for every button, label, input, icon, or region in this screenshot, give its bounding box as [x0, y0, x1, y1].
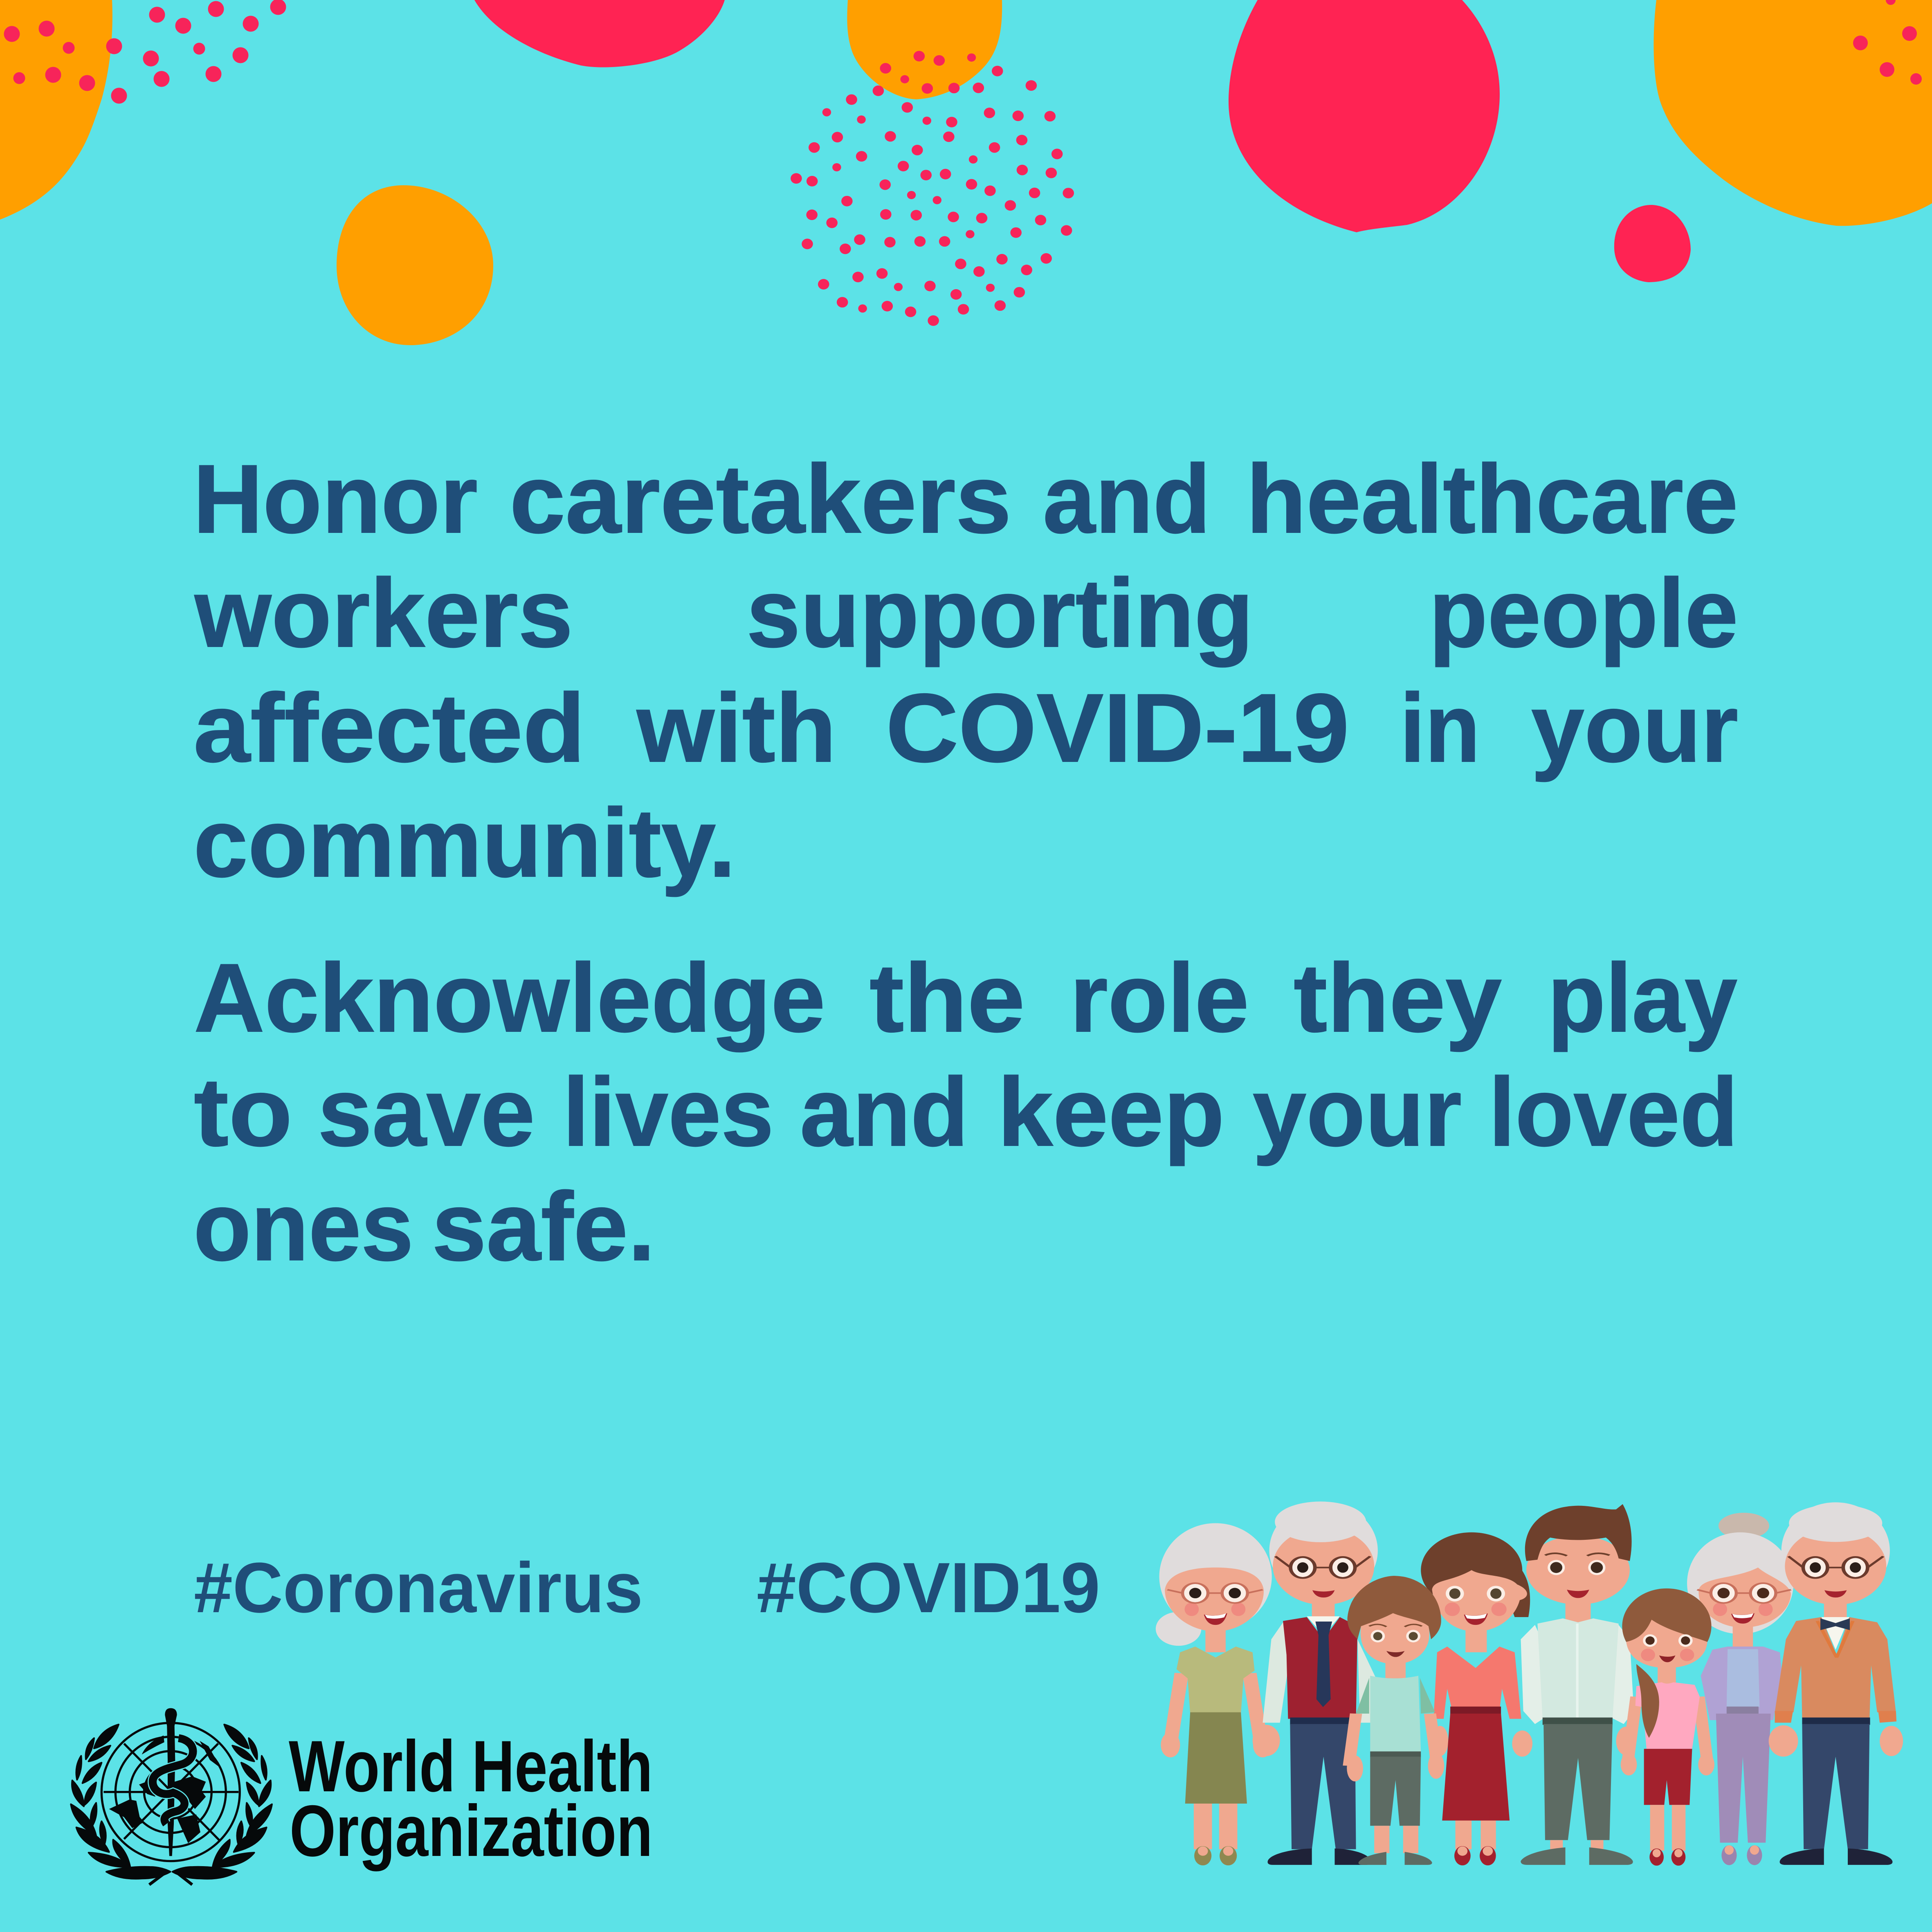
wreath left: [71, 1725, 171, 1879]
person: grandmother in purple: [1687, 1513, 1793, 1865]
text block: honor caretakers: Honor: [193, 445, 478, 553]
blob: small red: [1614, 205, 1691, 282]
text block: acknowledge the role: ones: [193, 1173, 413, 1281]
logo: World Health Organization: [71, 1708, 653, 1885]
staff and snake: [142, 1708, 193, 1856]
text block: acknowledge the role: save: [318, 1058, 535, 1166]
text block: acknowledge the role: Acknowledge: [194, 944, 825, 1052]
text block: acknowledge the role: to: [194, 1058, 292, 1166]
text block: acknowledge the role: loved: [1489, 1058, 1738, 1166]
text block: acknowledge the role: and: [800, 1058, 968, 1166]
text block: honor caretakers: your: [1531, 674, 1738, 782]
dots: top left cluster: [4, 0, 286, 104]
text block: honor caretakers: in: [1400, 674, 1480, 782]
text block: honor caretakers: community.: [193, 789, 736, 897]
blob: left orange: [0, 0, 112, 220]
text block: honor caretakers: [193, 445, 1738, 897]
person: boy in mint shirt: [1347, 1576, 1444, 1865]
person: grandmother in olive: [1156, 1523, 1272, 1865]
blob: top centre orange: [847, 0, 1002, 99]
text block: honor caretakers: supporting: [746, 559, 1254, 667]
text block: honor caretakers: COVID-19: [886, 674, 1349, 782]
person: grandfather in orange sweater: [1769, 1502, 1903, 1865]
dots: central circle of dots: [791, 51, 1074, 326]
icon: WHO emblem: [71, 1708, 272, 1885]
person: grandfather in red vest: [1253, 1501, 1378, 1865]
blob: large red: [1229, 0, 1500, 232]
person: girl in pink: [1621, 1588, 1714, 1866]
text block: acknowledge the role: [193, 944, 1738, 1281]
text block: honor caretakers: people: [1429, 559, 1738, 667]
text block: acknowledge the role: they: [1294, 944, 1502, 1052]
logo wordmark: World Health: [289, 1725, 653, 1807]
person: mother in red skirt: [1421, 1532, 1532, 1865]
text block: honor caretakers: caretakers: [510, 445, 1011, 553]
text block: acknowledge the role: role: [1070, 944, 1249, 1052]
dots: top right cluster: [1853, 0, 1922, 85]
text block: honor caretakers: healthcare: [1246, 445, 1738, 553]
text block: acknowledge the role: play: [1548, 944, 1737, 1052]
text block: acknowledge the role: your: [1253, 1058, 1462, 1166]
ribbon ends: [149, 1872, 192, 1885]
blob: right orange: [1653, 0, 1932, 226]
text block: honor caretakers: workers: [194, 559, 573, 667]
text block: acknowledge the role: keep: [997, 1058, 1224, 1166]
text block: honor caretakers: with: [636, 674, 836, 782]
hashtags: [194, 1548, 1100, 1627]
logo wordmark: [289, 1725, 653, 1871]
text block: acknowledge the role: the: [869, 944, 1025, 1052]
text block: acknowledge the role: lives: [563, 1058, 774, 1166]
blob: small orange: [337, 185, 493, 345]
text block: honor caretakers: affected: [193, 674, 585, 782]
decorative blobs and dots at top: [0, 0, 1932, 345]
blob: top red: [474, 0, 725, 67]
hashtags: #Coronavirus: [194, 1548, 643, 1627]
globe rings: [101, 1723, 240, 1861]
text block: honor caretakers: and: [1043, 445, 1211, 553]
text block: acknowledge the role: safe.: [432, 1173, 655, 1281]
logo wordmark: Organization: [290, 1790, 653, 1871]
illustration: family group: [1156, 1501, 1903, 1866]
continents: [109, 1741, 221, 1843]
hashtags: #COVID19: [757, 1548, 1100, 1627]
wreath right: [173, 1725, 272, 1879]
person: father in white shirt: [1512, 1504, 1636, 1865]
